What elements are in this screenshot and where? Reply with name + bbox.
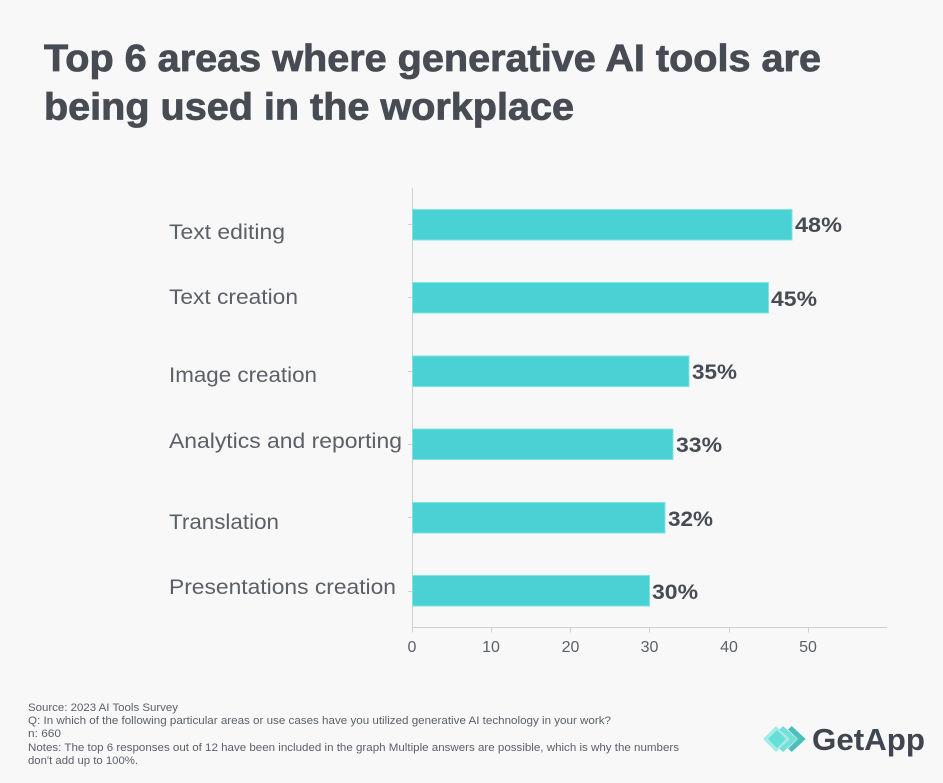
category labels: Translation xyxy=(169,511,279,534)
value labels: 48% xyxy=(795,214,842,237)
value labels xyxy=(652,214,842,604)
source notes: Source: 2023 AI Tools Survey xyxy=(28,702,179,714)
category labels xyxy=(169,221,402,599)
bars xyxy=(412,210,792,606)
category labels: Analytics and reporting xyxy=(169,430,402,453)
source notes: Q: In which of the following particular areas or use cases have you utilized generative AI technology in your work? xyxy=(28,715,611,727)
axis tick labels: 10 xyxy=(482,639,500,656)
category labels: Text editing xyxy=(169,221,285,244)
logo: GetApp xyxy=(763,722,925,757)
source notes: Notes: The top 6 responses out of 12 have been included in the graph Multiple answers are possible, which is why the numbers xyxy=(28,742,680,754)
title: being used in the workplace xyxy=(44,86,574,128)
value labels: 30% xyxy=(652,581,698,604)
value labels: 33% xyxy=(676,434,722,457)
source notes xyxy=(28,702,680,767)
category labels: Presentations creation xyxy=(169,576,396,599)
axis tick labels: 30 xyxy=(641,639,658,656)
source notes: don't add up to 100%. xyxy=(28,755,138,767)
source notes: n: 660 xyxy=(28,728,61,740)
value labels: 35% xyxy=(692,361,737,384)
axis tick labels: 20 xyxy=(562,639,580,656)
category labels: Text creation xyxy=(169,286,298,309)
title xyxy=(44,38,821,128)
category labels: Image creation xyxy=(169,364,317,387)
value labels: 45% xyxy=(771,288,817,311)
logo icon xyxy=(763,726,806,752)
value labels: 32% xyxy=(668,508,713,531)
chart axes xyxy=(408,188,887,632)
axis tick labels: 40 xyxy=(720,639,738,656)
bar chart xyxy=(169,188,887,656)
axis tick labels xyxy=(408,639,817,656)
axis tick labels: 0 xyxy=(408,639,417,656)
title: Top 6 areas where generative AI tools are xyxy=(44,38,821,80)
axis tick labels: 50 xyxy=(799,639,817,656)
logo wordmark: GetApp xyxy=(812,722,925,757)
